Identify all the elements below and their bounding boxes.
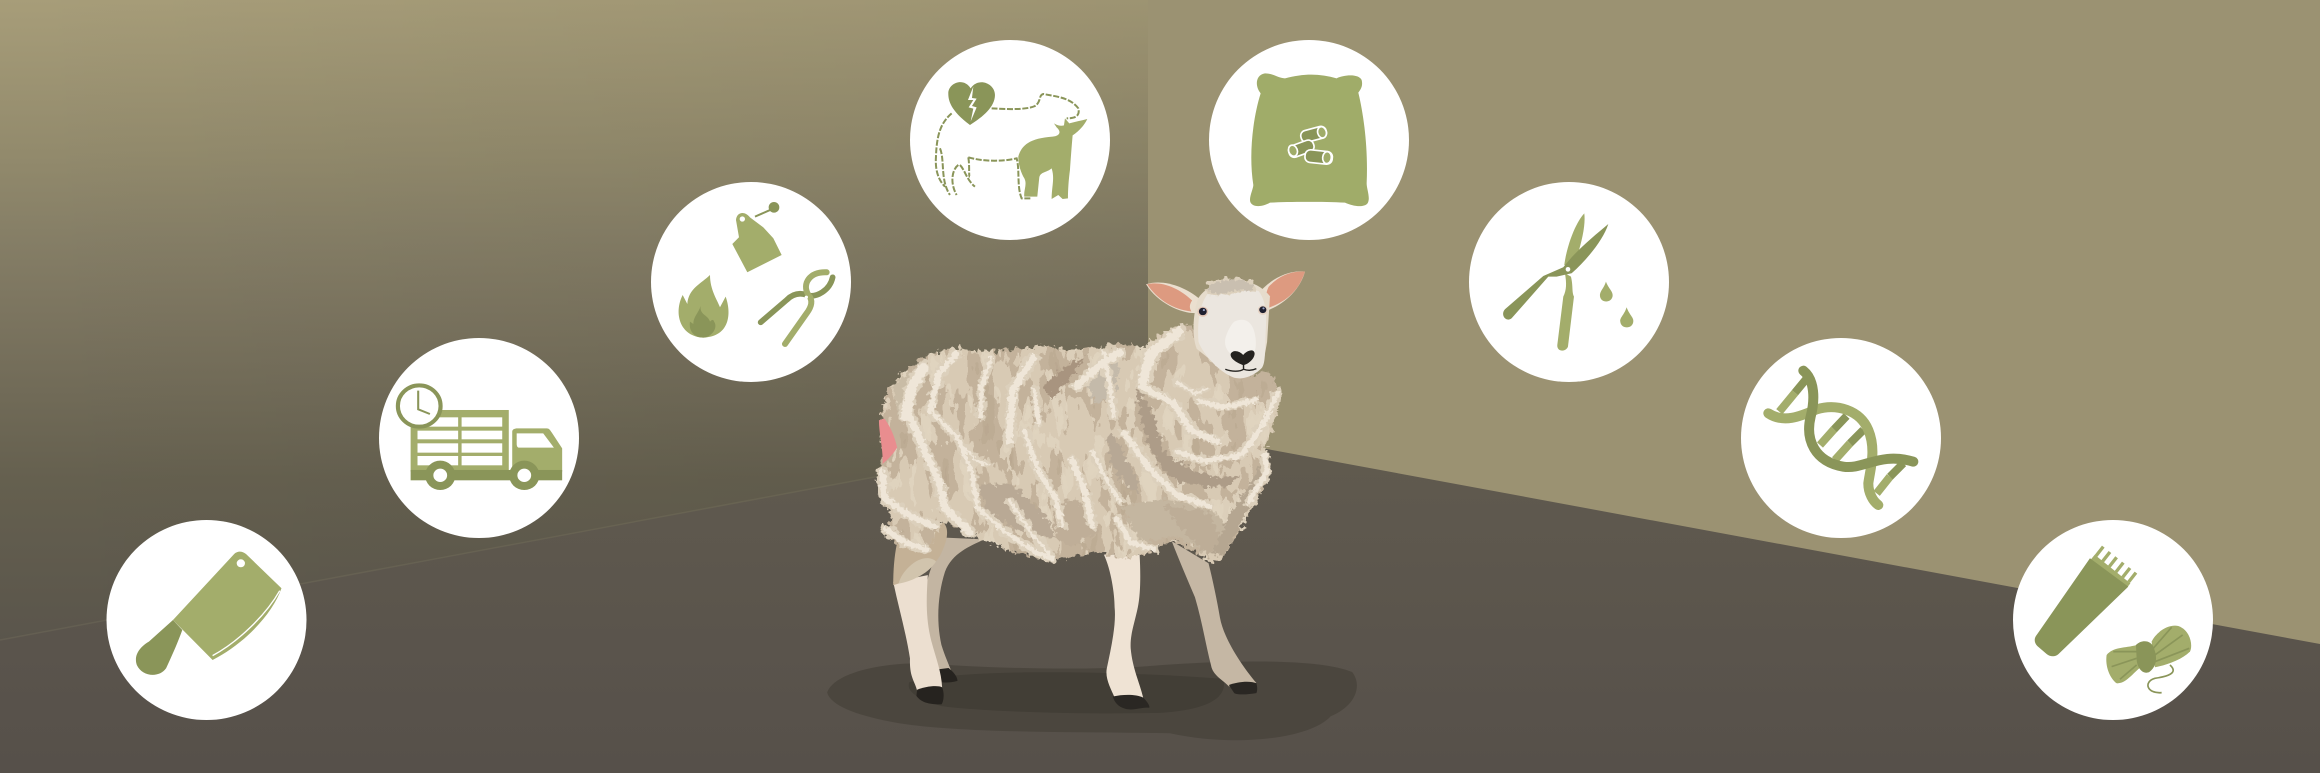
icon circle: broken heart, ewe and lamb bbox=[910, 40, 1110, 240]
eyes bbox=[1197, 305, 1268, 317]
icon: DNA helix bbox=[1768, 371, 1913, 505]
near hind hoof bbox=[916, 686, 944, 704]
near hind leg bbox=[893, 575, 942, 691]
near front hoof bbox=[1113, 695, 1149, 710]
left ear bbox=[1146, 283, 1200, 313]
fleece bbox=[878, 325, 1279, 563]
icon: transport truck bbox=[398, 385, 562, 490]
icon: ear tag, flame and pincers bbox=[679, 202, 833, 344]
icon circle: cleaver bbox=[106, 520, 306, 720]
icon: shears and blood drops bbox=[1503, 213, 1633, 351]
icon: feed sack with pellets bbox=[1250, 73, 1369, 206]
nose and mouth bbox=[1225, 350, 1256, 371]
icon circle: truck and clock bbox=[379, 338, 579, 538]
background: right wall bbox=[1148, 0, 2320, 773]
head tuft bbox=[1209, 279, 1253, 294]
icon circle: tag, fire, pincers bbox=[651, 182, 851, 382]
background: floor bbox=[0, 427, 2320, 773]
fleece base bbox=[878, 325, 1279, 563]
right ear bbox=[1257, 271, 1305, 311]
icon circle: feed bag bbox=[1209, 40, 1409, 240]
background: left wall bbox=[0, 0, 1149, 773]
fleece light tufts bbox=[881, 332, 1277, 559]
icon: clippers and wool skein bbox=[2035, 547, 2191, 693]
far front hoof bbox=[1229, 682, 1257, 694]
icon circle: DNA bbox=[1741, 338, 1941, 538]
sheep with shadow bbox=[827, 271, 1357, 740]
icon circle: clippers and wool bbox=[2013, 520, 2213, 720]
head backing bbox=[1194, 281, 1270, 376]
far hind hoof bbox=[938, 668, 957, 683]
icon circle: shears bbox=[1469, 182, 1669, 382]
paint mark bbox=[879, 419, 897, 464]
far hind leg bbox=[923, 538, 984, 673]
icon: broken heart, dashed ewe, lamb bbox=[936, 82, 1087, 199]
face bbox=[1198, 288, 1266, 378]
head bbox=[1146, 271, 1305, 378]
fleece shading patches bbox=[893, 356, 1263, 556]
near front leg bbox=[1104, 555, 1143, 698]
icon: cleaver bbox=[136, 552, 281, 675]
haunch bbox=[893, 522, 947, 585]
fleece mottling bbox=[878, 325, 1279, 563]
floor shadow bbox=[827, 662, 1357, 740]
far front leg bbox=[1172, 541, 1256, 686]
